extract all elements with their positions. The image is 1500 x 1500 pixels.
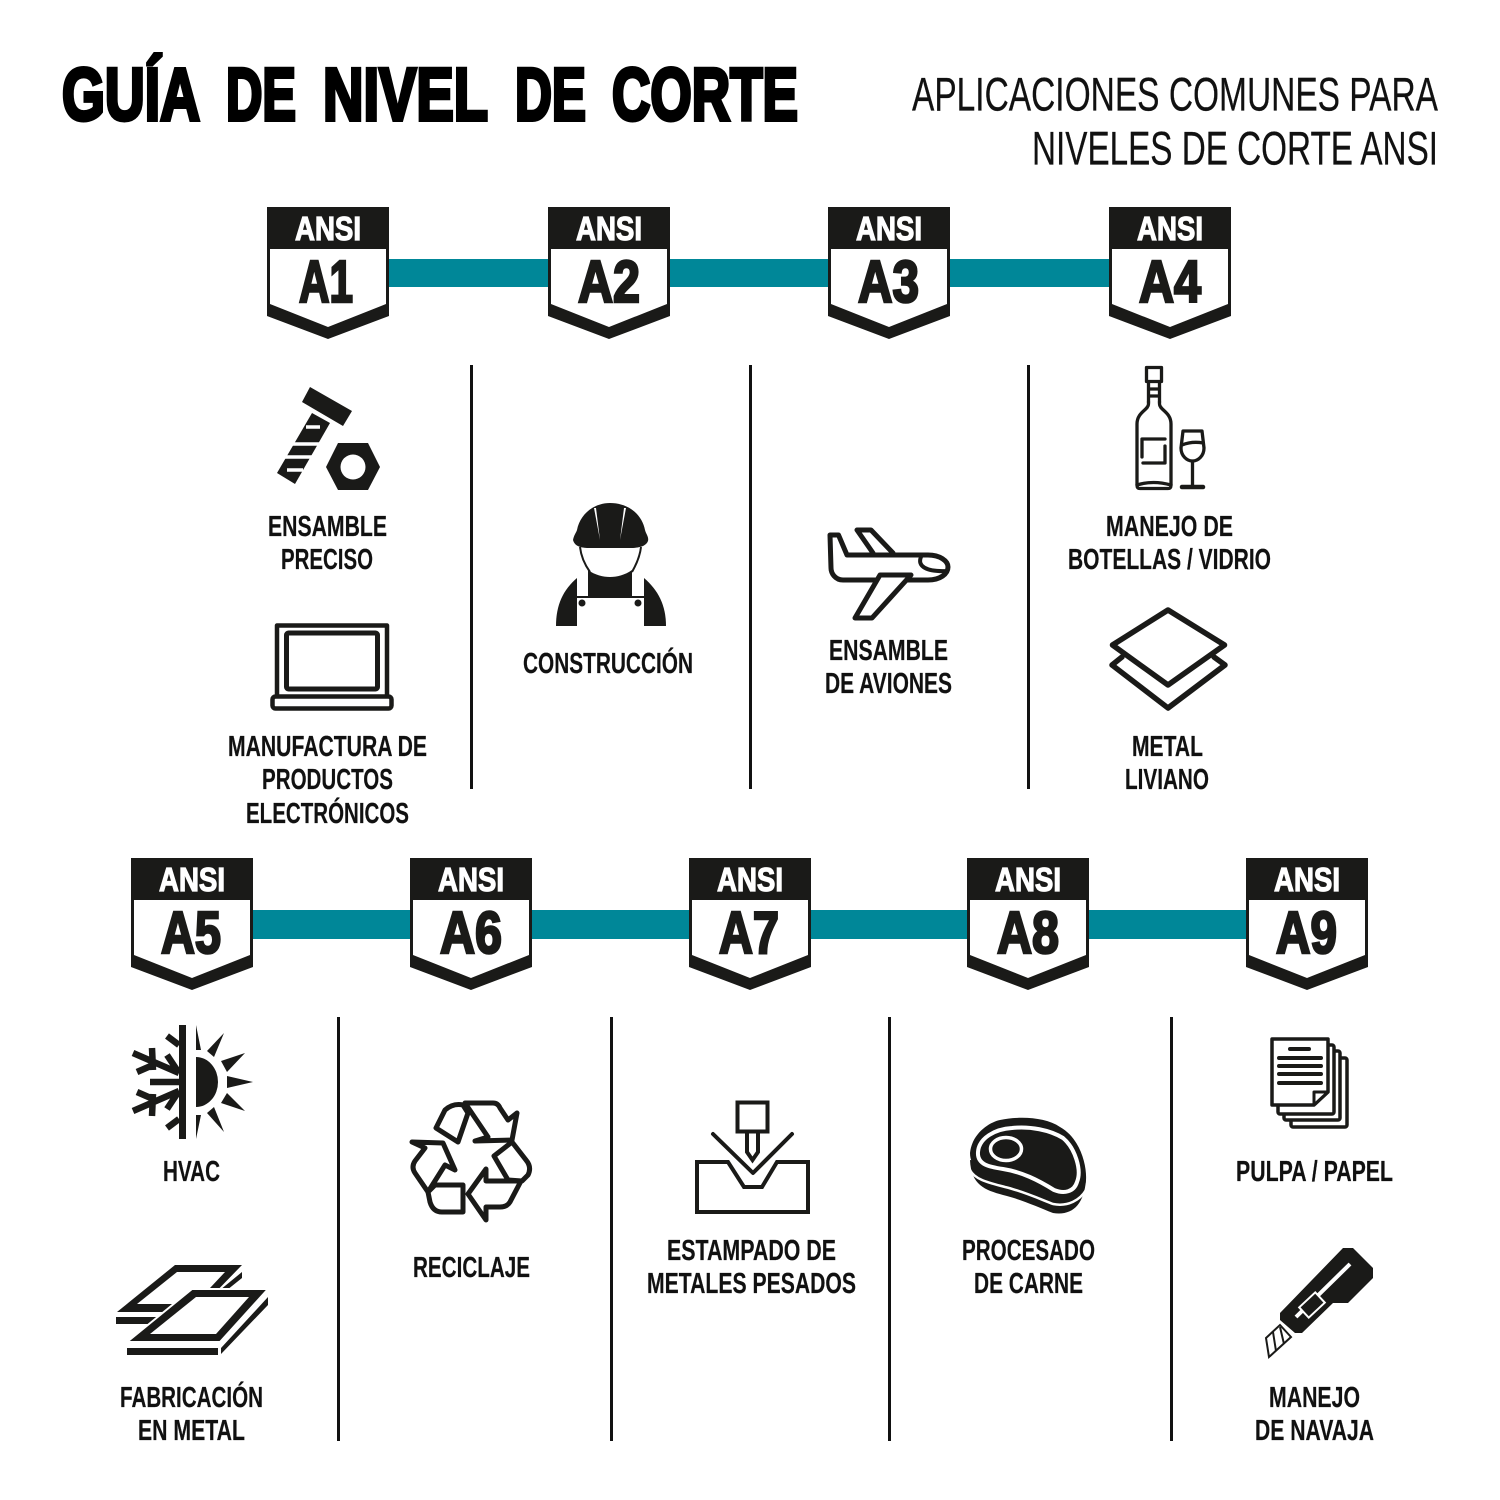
label: manejo de botellas / vidrio [1068,511,1271,576]
icon: construction worker [556,503,666,626]
label: estampado de metales pesados: ESTAMPADO DE [667,1235,836,1267]
badge: ANSI A5 [131,858,253,990]
title: NIVEL [323,53,488,136]
icon: recycling arrows [412,1103,530,1220]
title: DE [226,53,296,136]
badge: ANSI A2 [548,207,670,339]
label: procesado de carne: PROCESADO [962,1235,1095,1267]
label: manufactura de productos electrónicos: MANUFACTURA DE [228,731,427,763]
badge: ANSI A3: A3 [858,249,919,315]
label: metal liviano: LIVIANO [1125,764,1209,796]
label: construcción: CONSTRUCCIÓN [523,646,693,680]
icon: metal press [697,1102,808,1212]
badge: ANSI A4: A4 [1139,249,1201,315]
subtitle [912,68,1438,174]
label: manufactura de productos electrónicos: PRODUCTOS [262,764,393,796]
label: hvac: HVAC [163,1156,220,1188]
label: fabricación en metal: FABRICACIÓN [120,1380,263,1414]
label: manejo de navaja [1255,1382,1374,1447]
icon: snowflake and sun [133,1025,253,1139]
title: DE [515,53,586,136]
badge: ANSI A9: A9 [1276,900,1337,966]
label: ensamble de aviones: DE AVIONES [825,668,952,700]
title [62,53,798,136]
label: metal liviano [1125,731,1209,796]
icon: meat steak [970,1118,1086,1213]
badge: ANSI A9 [1246,858,1368,990]
badge: ANSI A6: ANSI [438,861,504,898]
badge: ANSI A5: ANSI [159,861,225,898]
icon: utility knife [1266,1248,1373,1357]
label: metal liviano: METAL [1132,731,1203,763]
label: estampado de metales pesados [647,1235,856,1300]
label: manufactura de productos electrónicos: ELECTRÓNICOS [246,796,409,830]
label: manejo de botellas / vidrio: BOTELLAS / VIDRIO [1068,544,1271,576]
badge: ANSI A2: ANSI [576,210,642,247]
badge: ANSI A6 [410,858,532,990]
badge: ANSI A3 [828,207,950,339]
badge: ANSI A7 [689,858,811,990]
label: ensamble de aviones [825,635,952,700]
badge: ANSI A6: A6 [440,900,502,966]
label: ensamble preciso: PRECISO [281,544,373,576]
label: manejo de navaja: MANEJO [1269,1382,1360,1414]
icon: laptop [272,626,392,708]
badge: ANSI A8 [967,858,1089,990]
label: manejo de botellas / vidrio: MANEJO DE [1106,511,1233,543]
badge: ANSI A1: ANSI [295,210,361,247]
title: GUÍA [62,53,200,136]
badge: ANSI A4 [1109,207,1231,339]
label: procesado de carne: DE CARNE [974,1268,1083,1300]
label: manejo de navaja: DE NAVAJA [1255,1415,1374,1447]
title: CORTE [612,53,798,136]
label: manufactura de productos electrónicos [228,731,427,830]
badge: ANSI A8: ANSI [995,861,1061,898]
label: fabricación en metal [120,1380,263,1447]
label: pulpa / papel: PULPA / PAPEL [1236,1156,1393,1188]
label: ensamble preciso: ENSAMBLE [268,511,387,543]
label: estampado de metales pesados: METALES PESADOS [647,1268,856,1300]
badge: ANSI A7: ANSI [717,861,783,898]
badge: ANSI A2: A2 [578,249,640,315]
icon: bolt and nut [277,387,380,490]
connector bar: bottom row [245,910,1255,939]
badge: ANSI A1: A1 [299,249,353,315]
connector bar: top row [380,259,1120,287]
badge: ANSI A5: A5 [161,900,221,966]
icon: bottle and glass [1137,368,1204,488]
label: procesado de carne [962,1235,1095,1300]
label: ensamble de aviones: ENSAMBLE [829,635,948,667]
icon: metal sheets [116,1265,268,1355]
badge: ANSI A1 [267,207,389,339]
badge: ANSI A3: ANSI [856,210,922,247]
badge: ANSI A4: ANSI [1137,210,1203,247]
icon: airplane [830,530,948,618]
icon: paper stack [1272,1039,1347,1127]
icon: sheet metal layers [1112,610,1225,708]
label: ensamble preciso [268,511,387,576]
label: reciclaje: RECICLAJE [413,1252,530,1284]
badge: ANSI A9: ANSI [1274,861,1340,898]
badge: ANSI A7: A7 [719,900,779,966]
label: fabricación en metal: EN METAL [138,1415,245,1447]
badge: ANSI A8: A8 [997,900,1059,966]
